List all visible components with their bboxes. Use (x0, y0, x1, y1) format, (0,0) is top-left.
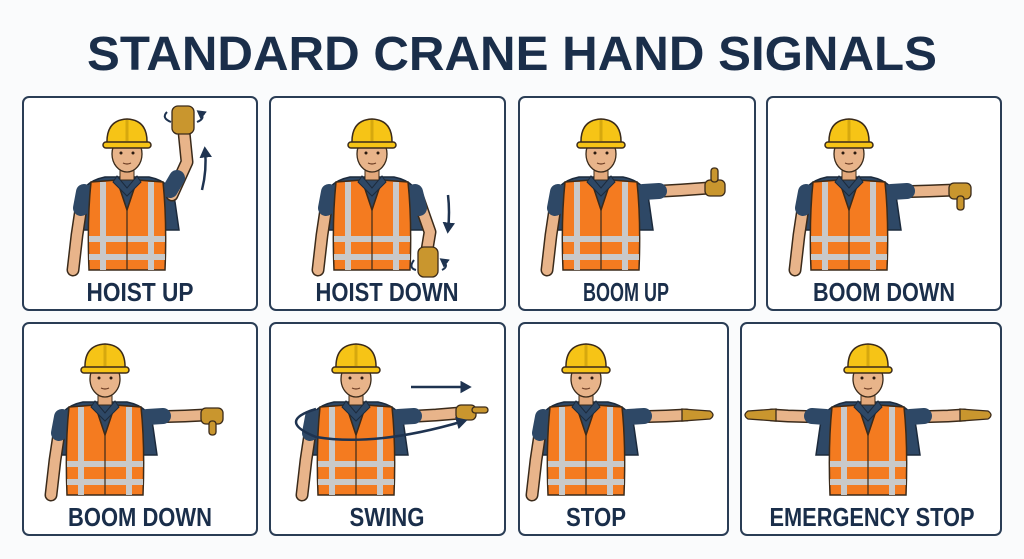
panel: swing (270, 323, 505, 535)
panel: hoist down (270, 97, 505, 310)
label: EMERGENCY STOP (770, 502, 974, 532)
label: BOOM UP (583, 277, 669, 307)
panel: boom down (bottom) (23, 323, 257, 535)
label: STOP (566, 502, 626, 532)
panel: boom down (top) (767, 97, 1001, 310)
label: SWING (350, 502, 424, 532)
label: BOOM DOWN (813, 277, 955, 307)
label: HOIST UP (86, 277, 194, 307)
panel: stop (519, 323, 728, 535)
panel: emergency stop (741, 323, 1001, 535)
label: BOOM DOWN (68, 502, 212, 532)
panel: boom up (519, 97, 755, 310)
title: STANDARD CRANE HAND SIGNALS (87, 28, 937, 81)
label: HOIST DOWN (316, 277, 458, 307)
panel: hoist up (23, 97, 257, 310)
